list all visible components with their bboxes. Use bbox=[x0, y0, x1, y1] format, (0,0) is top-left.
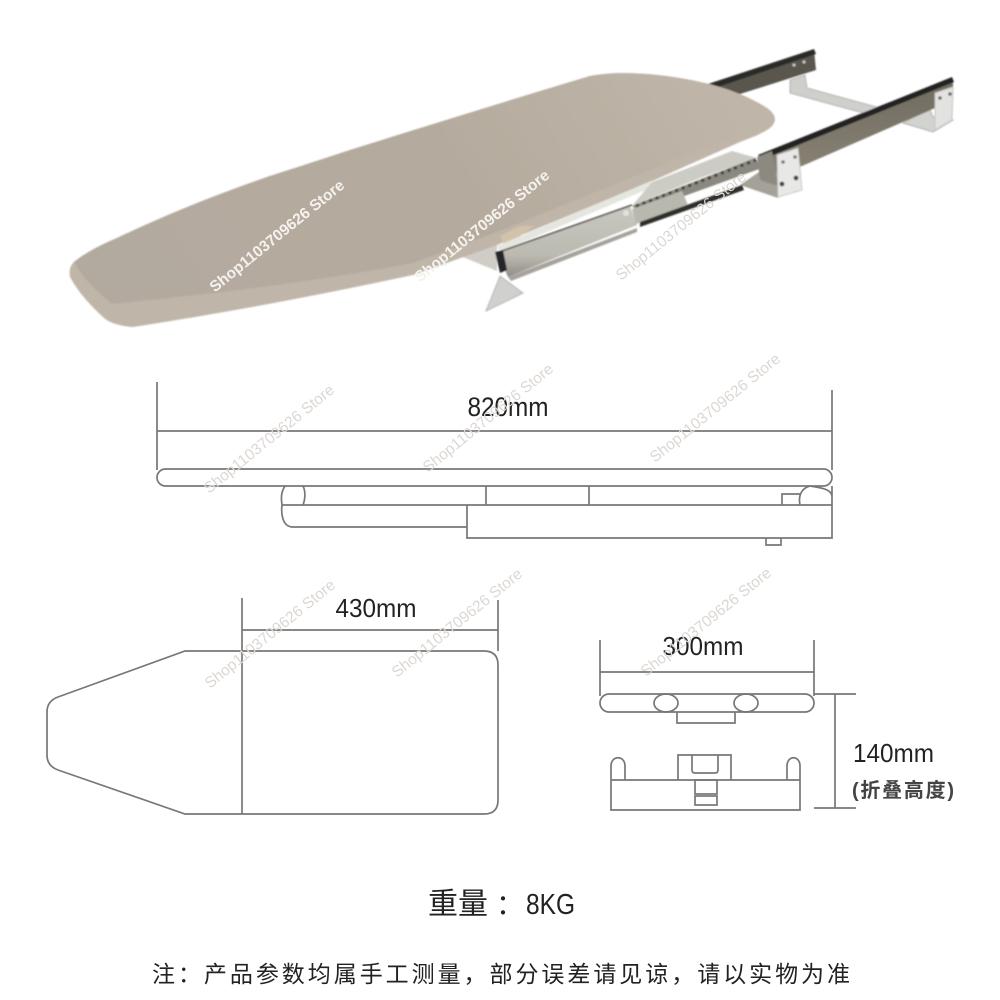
store watermarks: Shop1103709626 Store bbox=[201, 382, 338, 497]
820mm label: 820mm bbox=[468, 392, 548, 422]
rear cross bracket bbox=[790, 75, 953, 132]
store watermarks: Shop1103709626 Store bbox=[647, 351, 784, 466]
side view drawing with 820mm dimension bbox=[157, 382, 832, 545]
front mounting plate bbox=[777, 148, 802, 197]
300mm dimension lines bbox=[600, 640, 814, 696]
front lower bracket bbox=[740, 170, 782, 198]
rear mounting plate bbox=[935, 87, 953, 130]
board surface bbox=[70, 73, 775, 327]
product photo: pull-out ironing board bbox=[70, 49, 954, 327]
140mm label: 140mm bbox=[853, 738, 934, 768]
end view drawing with 300mm and 140mm dimensions bbox=[600, 631, 954, 810]
footnote: 注：产品参数均属手工测量，部分误差请见谅，请以实物为准 bbox=[152, 961, 850, 987]
slide assembly profile bbox=[281, 486, 832, 545]
weight heading: 重量 bbox=[428, 888, 488, 921]
telescopic slide bbox=[495, 151, 778, 281]
base section bbox=[611, 755, 800, 810]
store watermarks: Shop1103709626 Store bbox=[412, 167, 553, 286]
board section bbox=[600, 694, 814, 723]
430mm label: 430mm bbox=[336, 593, 416, 623]
weight heading: ： bbox=[496, 889, 524, 920]
board outline bbox=[47, 651, 498, 814]
store watermarks: Shop1103709626 Store bbox=[638, 565, 775, 680]
store watermarks: Shop1103709626 Store bbox=[613, 169, 750, 284]
140mm dimension lines bbox=[814, 694, 856, 808]
300mm label: 300mm bbox=[662, 631, 744, 661]
store watermarks bbox=[201, 167, 784, 692]
near rail bbox=[758, 77, 954, 178]
430mm dimension lines bbox=[242, 598, 498, 814]
far rail bbox=[705, 49, 816, 94]
store watermarks: Shop1103709626 Store bbox=[207, 177, 348, 296]
folding foot bbox=[486, 276, 523, 311]
top view drawing with 430mm dimension bbox=[47, 593, 498, 814]
store watermarks: Shop1103709626 Store bbox=[202, 577, 339, 692]
underside panel bbox=[458, 245, 497, 271]
board side profile bbox=[157, 469, 832, 486]
folded height label: (折叠高度) bbox=[852, 778, 954, 802]
820mm dimension lines bbox=[157, 382, 832, 470]
store watermarks: Shop1103709626 Store bbox=[420, 361, 557, 476]
weight heading: 8KG bbox=[526, 889, 575, 921]
store watermarks: Shop1103709626 Store bbox=[389, 566, 526, 681]
